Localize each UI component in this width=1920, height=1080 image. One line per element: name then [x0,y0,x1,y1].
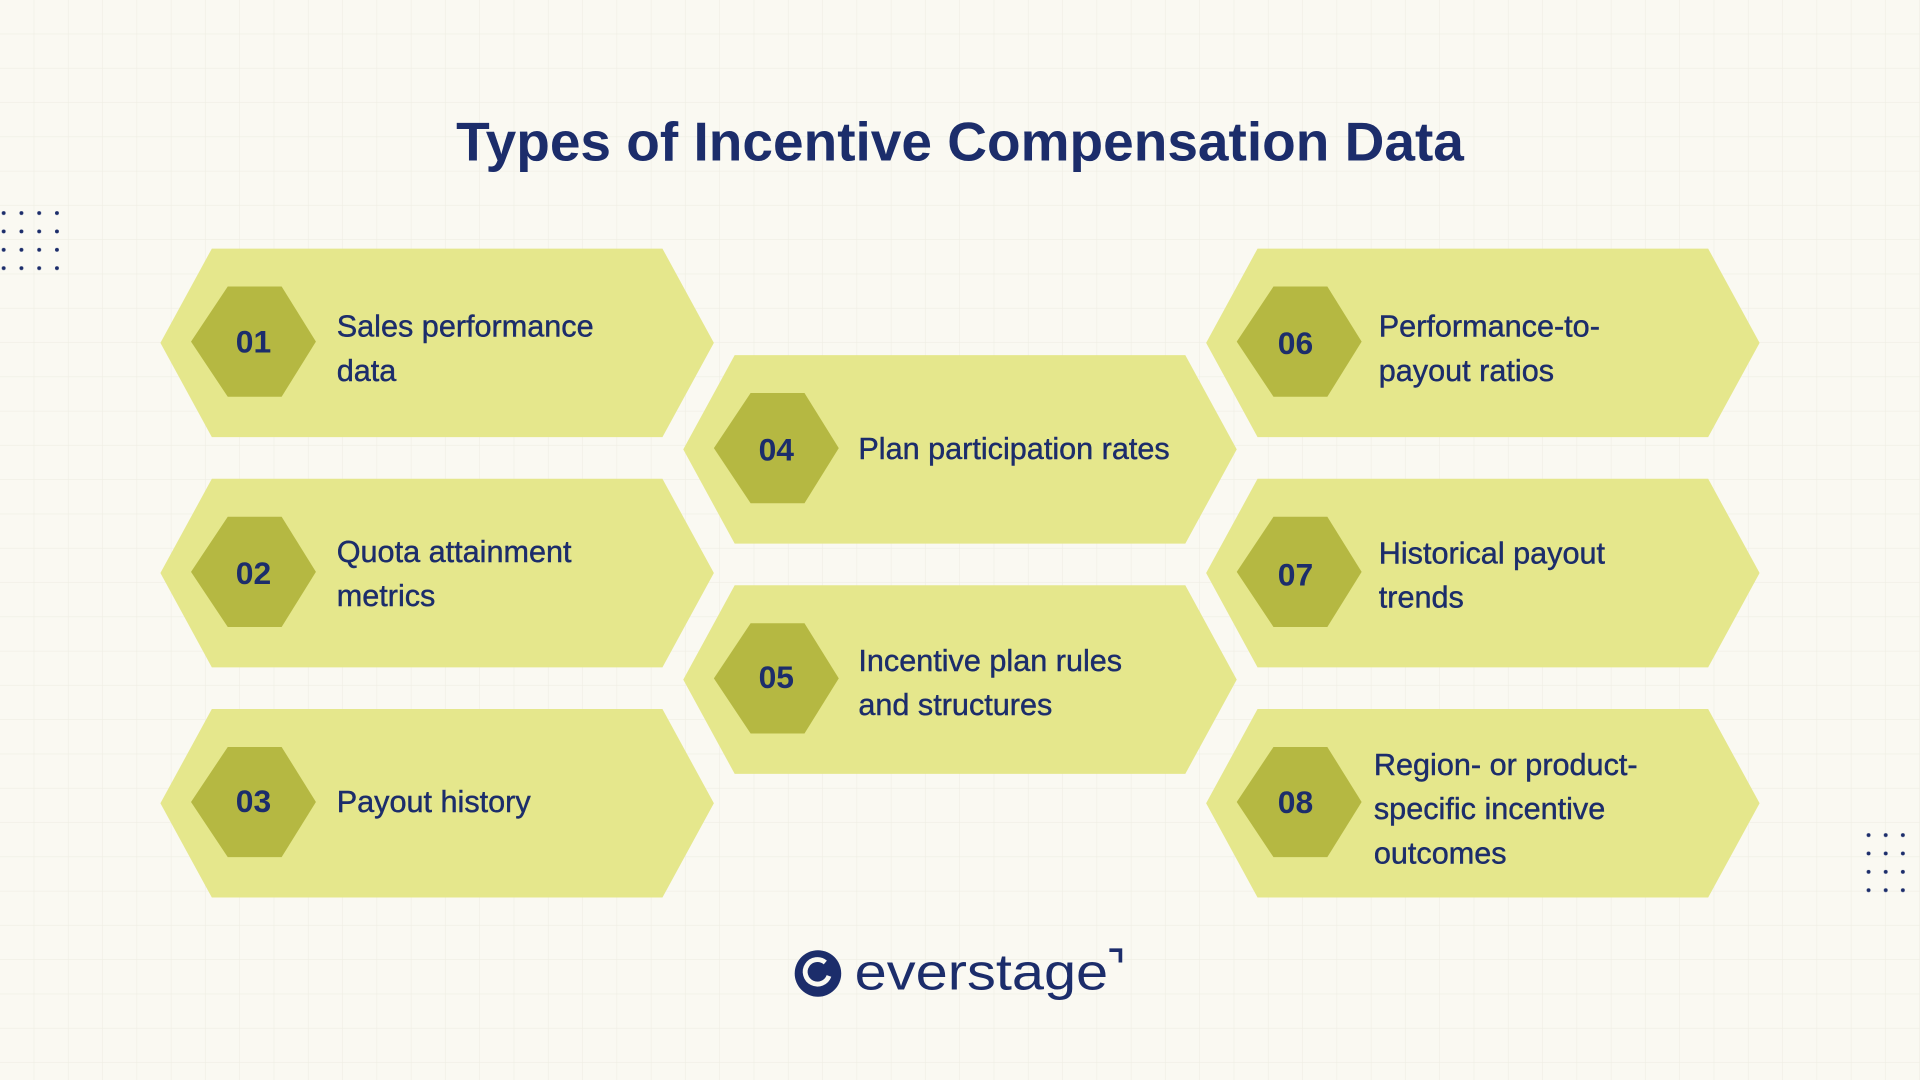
badge 03: 03 [236,783,271,819]
label 04: Plan participation rates [858,432,1170,466]
label 08: specific incentive [1374,792,1605,826]
label 02: metrics [337,579,435,613]
badge 07 [1237,517,1362,627]
badge 02 [191,517,316,627]
label 06: payout ratios [1379,354,1554,388]
dots: bottom right [1864,830,1915,899]
badge 05: 05 [759,659,794,695]
item 07 [1206,479,1760,667]
badge 08 [1237,747,1362,857]
item 06 [1206,249,1760,437]
item 04 [683,355,1237,544]
label 05: Incentive plan rules [858,644,1122,678]
label 08: Region- or product- [1374,748,1638,782]
badge 05 [714,623,839,733]
badge 08: 08 [1278,784,1313,820]
item 01 [160,249,714,437]
label 05: and structures [858,688,1052,722]
dots: top left [0,208,61,279]
label 08: outcomes [1374,836,1507,870]
label 07: trends [1379,580,1464,614]
label 01: Sales performance [337,310,594,344]
badge 01: 01 [236,324,271,360]
label 02: Quota attainment [337,535,572,569]
badge 06 [1237,287,1362,397]
badge 04 [714,393,839,503]
label 07: Historical payout [1379,536,1605,570]
badge 06: 06 [1278,325,1313,361]
item 05 [683,585,1237,774]
label 01: data [337,354,397,388]
badge 03 [191,747,316,857]
logo: everstage [855,942,1108,1000]
label 06: Performance-to- [1379,310,1600,344]
badge 02: 02 [236,555,271,591]
item 03 [160,709,714,898]
badge 01 [191,287,316,397]
label 03: Payout history [337,785,531,819]
item 08 [1206,709,1760,898]
title: Types of Incentive Compensation Data [456,110,1464,172]
badge 04: 04 [759,431,794,467]
badge 07: 07 [1278,556,1313,592]
logo [795,942,1120,1000]
item 02 [160,479,714,667]
